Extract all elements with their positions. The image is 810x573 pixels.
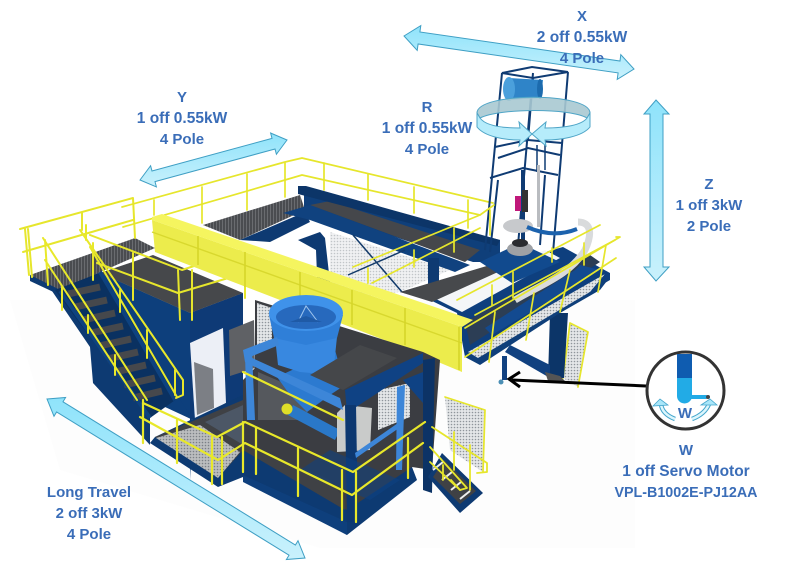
rear walkway	[203, 186, 500, 272]
arrow: Y travel	[140, 133, 287, 187]
machine	[20, 67, 620, 535]
label: X: X	[577, 8, 587, 25]
arrow: Z travel	[644, 100, 669, 281]
left platform rails	[20, 198, 245, 320]
floor shadow	[10, 300, 635, 548]
stair support frame	[30, 238, 155, 445]
arrow: pointer to W	[509, 372, 646, 387]
label: R: R	[422, 99, 433, 116]
label: Y: Y	[177, 89, 187, 106]
label: W	[614, 442, 758, 501]
right platform supports	[498, 313, 568, 384]
label: Y: 1 off 0.55kW	[137, 110, 228, 127]
yellow beam	[152, 214, 473, 372]
label: X: 2 off 0.55kW	[537, 29, 628, 46]
arrow: long travel	[47, 398, 305, 560]
label: W: 1 off Servo Motor	[622, 463, 750, 480]
hopper frame	[243, 337, 435, 522]
label: R: 1 off 0.55kW	[382, 120, 473, 137]
right walkway	[400, 247, 610, 365]
label: Y: 4 Pole	[160, 131, 204, 148]
small stairs	[428, 397, 487, 513]
label: Z: 1 off 3kW	[676, 197, 743, 214]
mesh backdrop and braces	[298, 232, 450, 300]
icon: W servo detail: W	[678, 405, 693, 422]
label: Long Travel: 4 Pole	[67, 526, 111, 543]
right gate	[563, 323, 588, 387]
right walkway rails	[353, 205, 620, 362]
icon: cable drum	[503, 77, 543, 101]
arrow: X travel	[404, 26, 634, 79]
main stairs	[55, 272, 178, 418]
label: R: 4 Pole	[405, 141, 449, 158]
cabin	[100, 255, 255, 480]
lower rails	[140, 372, 425, 522]
tower	[480, 67, 590, 300]
label: R	[382, 99, 473, 158]
label: Long Travel: Long Travel	[47, 484, 131, 501]
label: Z: 2 Pole	[687, 218, 731, 235]
cabin door	[190, 328, 226, 420]
far guard rail	[122, 158, 493, 228]
icon: right rotation arrow	[692, 399, 717, 419]
hopper	[269, 295, 372, 452]
label: Y	[137, 89, 228, 148]
label: Long Travel: 2 off 3kW	[56, 505, 123, 522]
cabin panel	[229, 320, 255, 376]
rear frame under hopper	[243, 300, 440, 510]
icon: W servo detail	[647, 352, 724, 429]
label: Z: Z	[704, 176, 714, 193]
icon: left rotation arrow	[653, 399, 675, 419]
label: Z	[676, 176, 743, 235]
lower platform	[150, 390, 417, 535]
label: X	[537, 8, 628, 67]
label: W: W	[679, 442, 694, 459]
stair rails	[43, 225, 183, 400]
label: X: 4 Pole	[560, 50, 604, 67]
label: W: VPL-B1002E-PJ12AA	[614, 485, 758, 501]
arrow: R rotation	[477, 97, 590, 146]
label: Long Travel	[47, 484, 131, 543]
